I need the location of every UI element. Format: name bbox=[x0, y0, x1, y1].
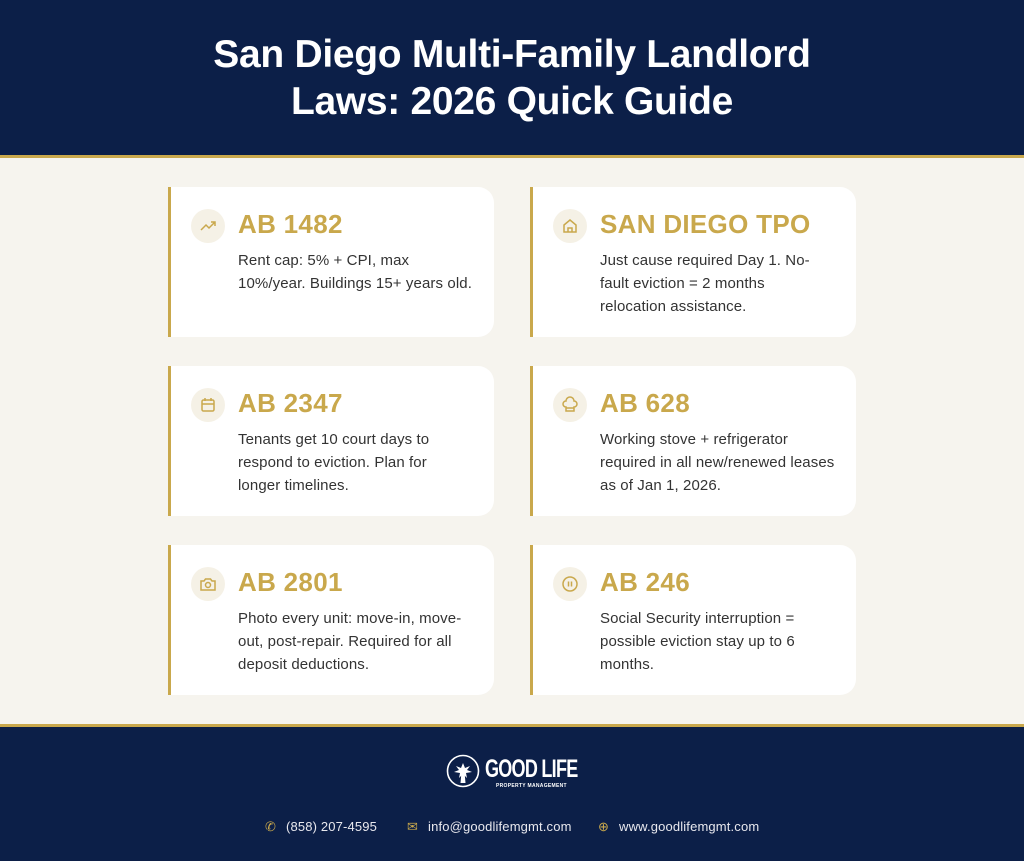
card: AB 1482: 10%/year. Buildings 15+ years old. bbox=[238, 275, 472, 292]
card: San Diego TPO: relocation assistance. bbox=[600, 298, 746, 315]
contact: phone: ✆ (858) 207-4595 bbox=[265, 819, 377, 834]
card: San Diego TPO: Just cause required Day 1. No- bbox=[600, 252, 810, 269]
card: AB 246: Social Security interruption = bbox=[600, 610, 794, 627]
card: AB 2801: out, post-repair. Required for all bbox=[238, 633, 452, 650]
icon: chef hat bbox=[553, 388, 587, 422]
logo: PROPERTY MANAGEMENT bbox=[496, 783, 567, 789]
card: AB 2801 bbox=[168, 545, 494, 695]
card: AB 2347: longer timelines. bbox=[238, 477, 349, 494]
card: AB 1482: AB 1482 bbox=[238, 209, 343, 239]
card: AB 628: Working stove + refrigerator bbox=[600, 431, 788, 448]
card: San Diego TPO: SAN DIEGO TPO bbox=[600, 209, 810, 239]
card: AB 2347: respond to eviction. Plan for bbox=[238, 454, 427, 471]
card: AB 628 bbox=[530, 366, 856, 516]
card: San Diego TPO: fault eviction = 2 months bbox=[600, 275, 765, 292]
icon: pause bbox=[553, 567, 587, 601]
card: AB 2801: AB 2801 bbox=[238, 567, 343, 597]
title: San Diego Multi-Family Landlord bbox=[213, 33, 811, 76]
card: AB 628: required in all new/renewed leases bbox=[600, 454, 834, 471]
card: AB 2347: AB 2347 bbox=[238, 388, 343, 418]
card: AB 2347 bbox=[168, 366, 494, 516]
card: AB 246 bbox=[530, 545, 856, 695]
title: Laws: 2026 Quick Guide bbox=[291, 80, 733, 123]
title bbox=[213, 33, 811, 123]
card: AB 246: months. bbox=[600, 656, 654, 673]
contact: web: ⊕ www.goodlifemgmt.com bbox=[598, 819, 759, 834]
card: AB 2347: Tenants get 10 court days to bbox=[238, 431, 429, 448]
card: AB 2801: deposit deductions. bbox=[238, 656, 369, 673]
card: AB 628: as of Jan 1, 2026. bbox=[600, 477, 721, 494]
logo bbox=[446, 754, 578, 789]
footer bbox=[0, 724, 1024, 861]
logo: GOOD LIFE bbox=[485, 755, 578, 783]
icon: calendar bbox=[191, 388, 225, 422]
card: AB 2801: Photo every unit: move-in, move- bbox=[238, 610, 461, 627]
contact: email: ✉ info@goodlifemgmt.com bbox=[407, 819, 572, 834]
card: AB 1482 bbox=[168, 187, 494, 337]
card: AB 1482: Rent cap: 5% + CPI, max bbox=[238, 252, 409, 269]
card: AB 628: AB 628 bbox=[600, 388, 690, 418]
card: AB 246: possible eviction stay up to 6 bbox=[600, 633, 795, 650]
header bbox=[0, 0, 1024, 158]
icon: trending bbox=[191, 209, 225, 243]
icon: camera bbox=[191, 567, 225, 601]
card: AB 246: AB 246 bbox=[600, 567, 690, 597]
icon: home bbox=[553, 209, 587, 243]
card: San Diego TPO bbox=[530, 187, 856, 337]
